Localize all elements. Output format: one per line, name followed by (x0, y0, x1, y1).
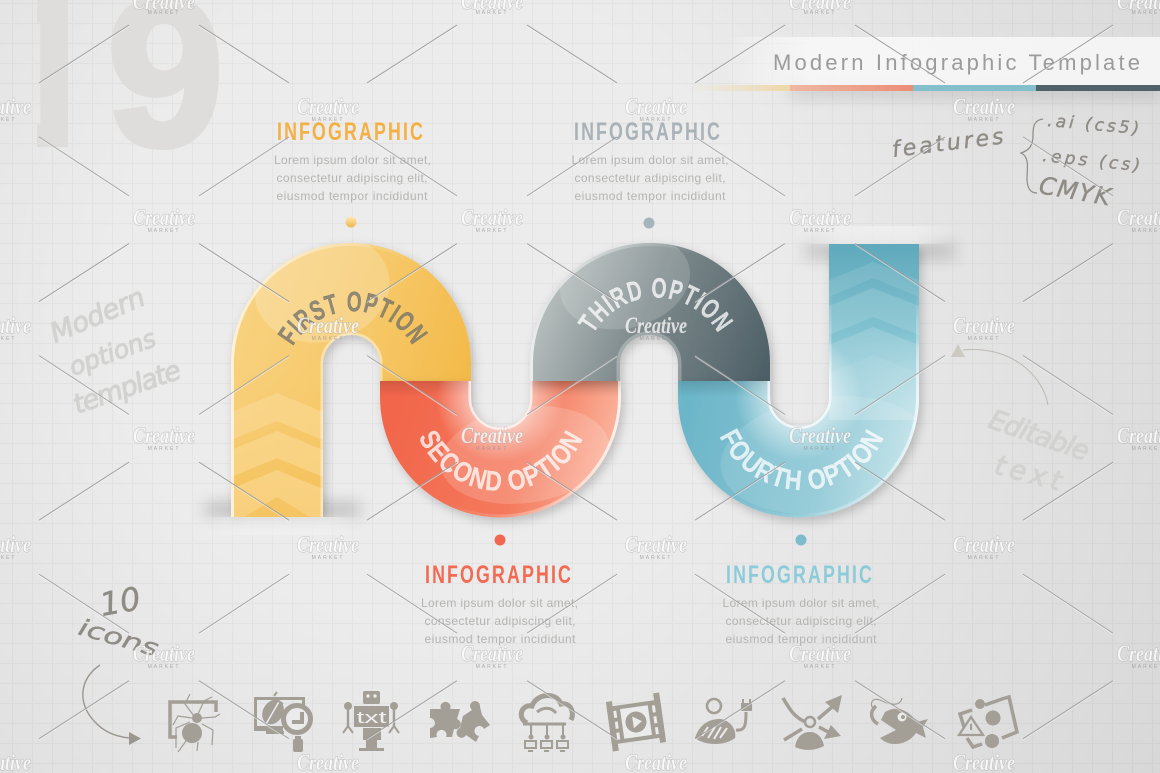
watermark logos: MARKET (148, 228, 180, 234)
watermark logos: MARKET (968, 117, 1000, 123)
watermark logos: MARKET (640, 117, 672, 123)
curved label: third option: THIRD OPTION (577, 278, 734, 332)
handwritten features note: .eps (cs) (1041, 146, 1141, 176)
ribbon segment: first option yellow (231, 221, 471, 540)
text block: fourth option: INFOGRAPHIC (726, 561, 874, 589)
icon: fish taking bait (871, 698, 928, 744)
ribbon segment: second option red (378, 380, 628, 526)
text block: first option: Lorem ipsum dolor sit amet, (274, 153, 431, 167)
text block: fourth option: eiusmod tempor incididunt (726, 632, 877, 646)
text block: second option (421, 561, 578, 646)
icon: person with plug (695, 699, 752, 744)
curved label: first option: FIRST OPTION (277, 292, 428, 346)
icon: spider on window (170, 694, 220, 752)
handwritten features note: features (891, 124, 1005, 163)
text block: third option: INFOGRAPHIC (574, 118, 722, 146)
text block: second option: INFOGRAPHIC (425, 561, 573, 589)
watermark logos: MARKET (968, 336, 1000, 342)
watermark logos: Creative (789, 423, 851, 448)
dot: fourth option (796, 534, 806, 546)
handwritten note: modern options template: options (65, 324, 160, 382)
text block: second option: Lorem ipsum dolor sit amet, (421, 596, 578, 610)
watermark logos: Creative (461, 205, 523, 230)
text block: second option: eiusmod tempor incididunt (424, 632, 576, 646)
watermark logos: MARKET (312, 555, 344, 561)
icon: puzzle pieces (430, 701, 490, 742)
icon: robot with txt screen: txt (356, 708, 387, 727)
handwritten note: 10 icons with arrow (75, 579, 161, 745)
ribbon segment: fourth option blue (678, 244, 937, 527)
watermark logos: MARKET (476, 664, 508, 670)
watermark logos: MARKET (148, 10, 180, 16)
watermark logos: MARKET (476, 446, 508, 452)
handwritten features note (891, 111, 1141, 212)
handwritten features note: CMYK (1037, 171, 1115, 212)
text block: second option: consectetur adipiscing elit, (424, 614, 576, 628)
text block: third option (572, 118, 728, 203)
handwritten note: 10 icons with arrow: 10 (97, 579, 143, 624)
watermark logos: Creative (461, 423, 523, 448)
icon: film strip with play (606, 692, 666, 752)
shelf strips (195, 226, 955, 535)
watermark logos: MARKET (148, 664, 180, 670)
dot: second option (494, 534, 506, 546)
curved label: second option: SECOND OPTION (420, 430, 582, 491)
ribbon segment: third option gray (530, 221, 770, 381)
watermark logos: Creative (789, 641, 851, 666)
icon: cloud network (521, 696, 572, 751)
text block: first option: consectetur adipiscing elit, (276, 171, 428, 185)
watermark logos: MARKET (312, 117, 344, 123)
text block: first option: eiusmod tempor incididunt (276, 189, 428, 203)
text block: first option (274, 118, 431, 203)
watermark logos: MARKET (148, 446, 180, 452)
watermark logos: MARKET (640, 336, 672, 342)
handwritten note: modern options template: Modern (46, 282, 150, 349)
curved label: fourth option: FOURTH OPTION (720, 428, 884, 490)
watermark logos: Creative (133, 641, 195, 666)
icon: crossroad arrows (783, 695, 842, 750)
text block: fourth option (722, 561, 880, 646)
handwritten features note: .ai (cs5) (1047, 111, 1140, 139)
watermark logos: Creative (789, 205, 851, 230)
watermark logos: MARKET (640, 555, 672, 561)
handwritten note: editable text with arrow: text (991, 450, 1066, 498)
dot: first option (346, 216, 356, 228)
text block: first option: INFOGRAPHIC (277, 118, 425, 146)
text block: third option: Lorem ipsum dolor sit amet, (572, 153, 728, 167)
watermark logos: MARKET (312, 336, 344, 342)
shelf shadows behind ribbon ends (205, 244, 955, 517)
watermark logos: Creative (953, 94, 1015, 119)
watermark logos: MARKET (804, 664, 836, 670)
handwritten note: modern options template (46, 282, 185, 421)
handwritten note: editable text with arrow: Editable (985, 404, 1093, 467)
watermark logos: Creative (133, 205, 195, 230)
watermark logos: Creative (625, 94, 687, 119)
watermark logos: Creative (297, 94, 359, 119)
watermark logos: Creative (625, 532, 687, 557)
title banner (690, 37, 1160, 96)
watermark logos: Creative (133, 423, 195, 448)
icon: bug search on monitor (254, 692, 310, 752)
watermark logos: Creative (461, 641, 523, 666)
icon: warning window (959, 697, 1017, 748)
watermark logos: Creative (953, 313, 1015, 338)
watermark logos: MARKET (968, 555, 1000, 561)
text block: fourth option: Lorem ipsum dolor sit amet, (722, 596, 880, 610)
icon: robot with txt screen (343, 691, 399, 751)
watermark logos: Creative (297, 313, 359, 338)
watermark logos: Creative (297, 532, 359, 557)
big template number 19 (37, 0, 219, 150)
watermark logos: MARKET (476, 228, 508, 234)
dot: third option (644, 218, 654, 228)
handwritten note: 10 icons with arrow: icons (75, 615, 161, 662)
watermark logos: MARKET (804, 10, 836, 16)
handwritten note: modern options template: template (69, 355, 185, 421)
watermark logos: Creative (625, 313, 687, 338)
text block: third option: consectetur adipiscing elit, (574, 171, 726, 185)
watermark logos: MARKET (804, 446, 836, 452)
banner title text: Modern Infographic Template (773, 50, 1140, 75)
text block: fourth option: consectetur adipiscing elit, (726, 614, 876, 628)
watermark logos: Creative (953, 532, 1015, 557)
handwritten note: editable text with arrow (951, 344, 1093, 498)
watermark logos: MARKET (804, 228, 836, 234)
watermark logos: MARKET (476, 10, 508, 16)
text block: third option: eiusmod tempor incididunt (574, 189, 726, 203)
